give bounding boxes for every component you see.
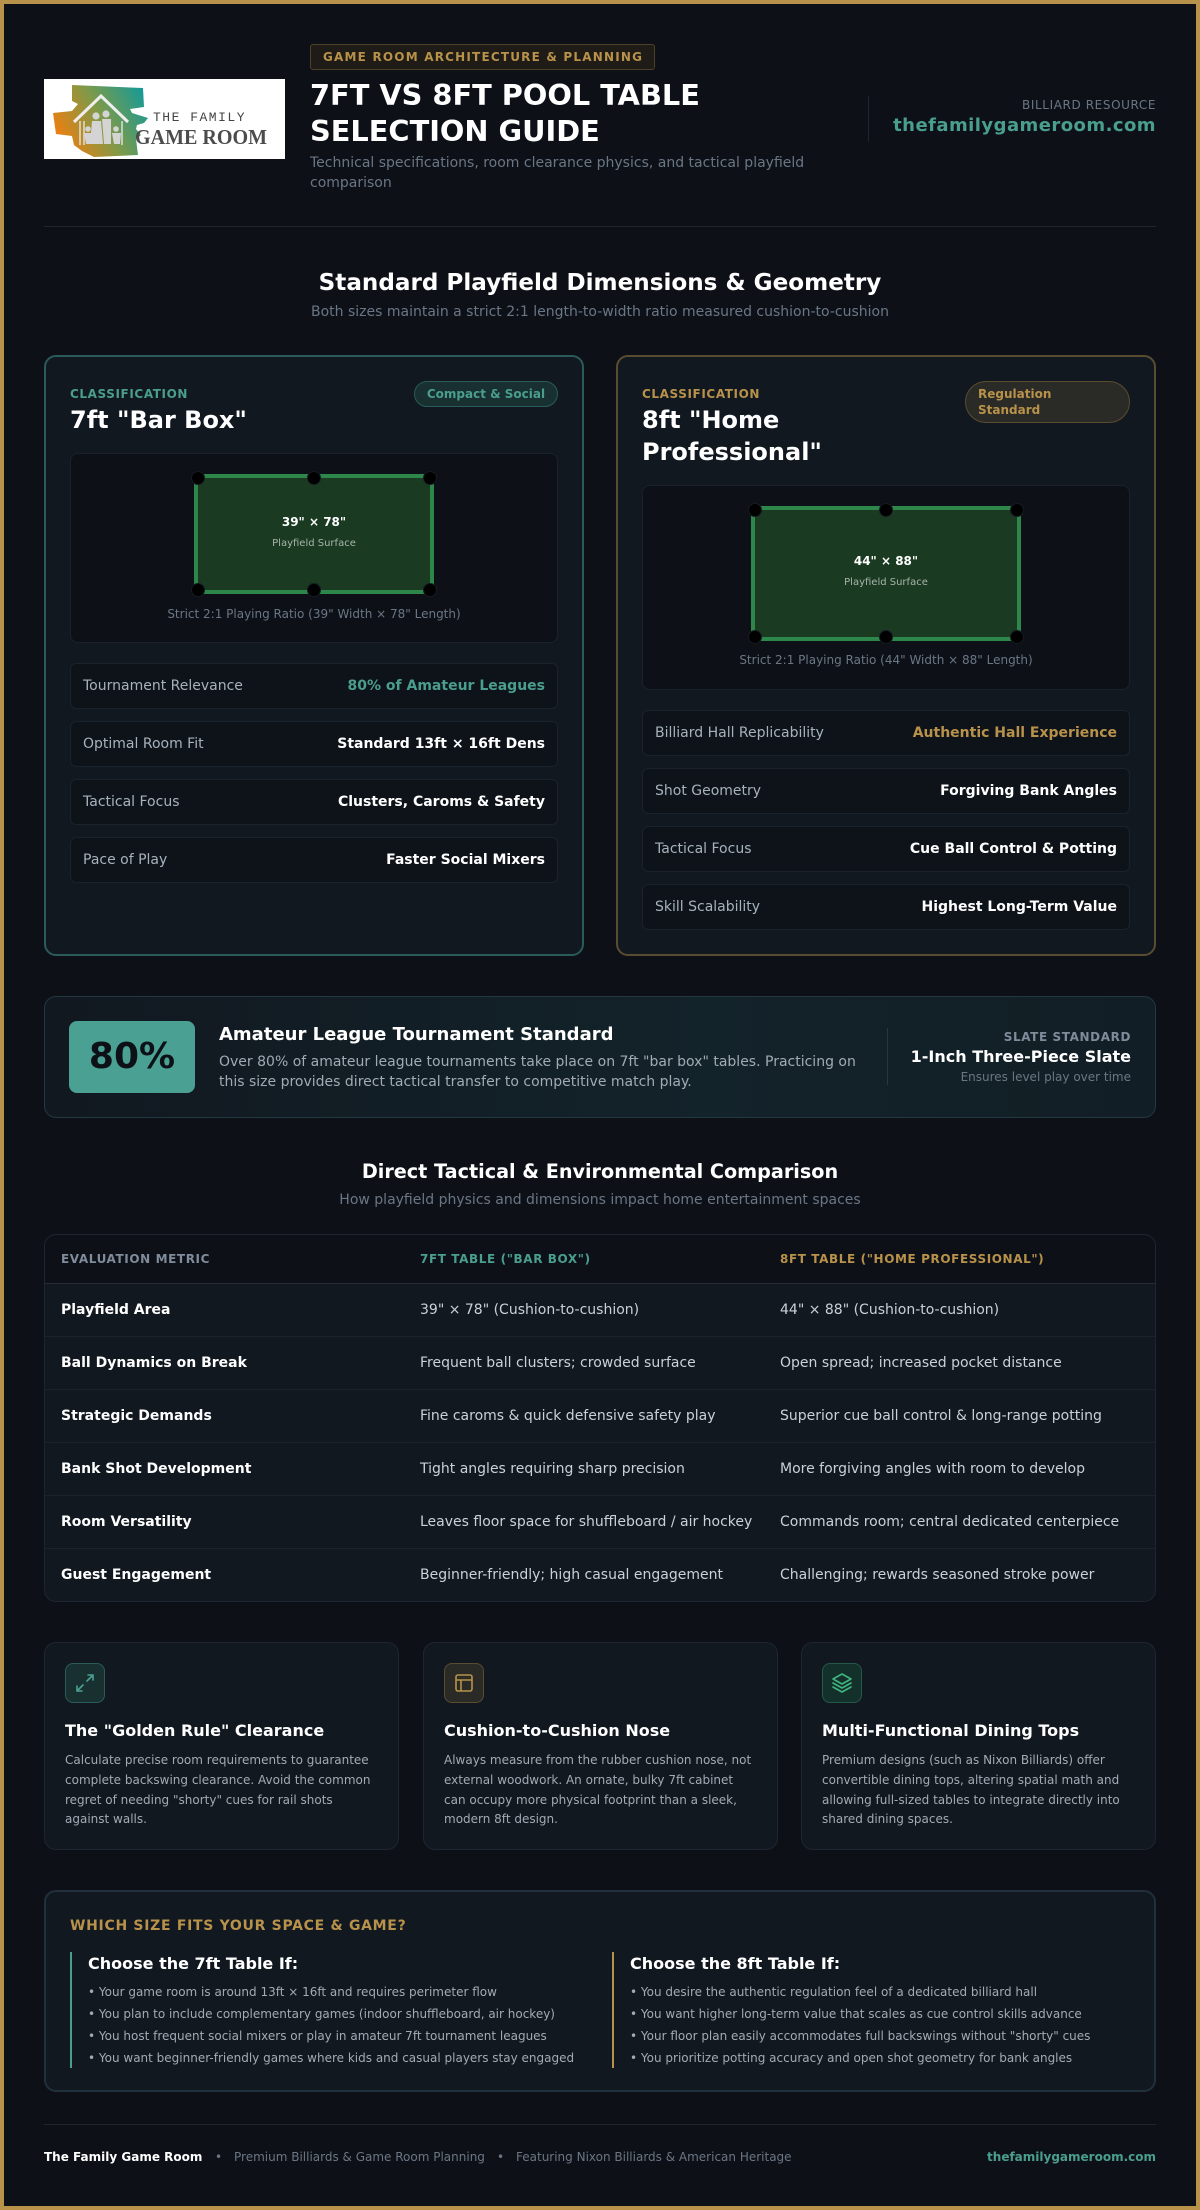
main title	[310, 78, 700, 148]
footer	[44, 2150, 1156, 2164]
bullet list: • Your game room is around 13ft × 16ft and requires perimeter flow	[88, 1985, 497, 1999]
section heading: dimensions: Standard Playfield Dimensions & Geometry	[319, 270, 881, 296]
table name: Professional"	[642, 438, 822, 466]
logo: GAME ROOM	[135, 125, 267, 149]
callout body	[219, 1054, 856, 1090]
column heading: Choose the 8ft Table If:	[630, 1954, 840, 1973]
pill badge	[965, 381, 1130, 423]
panel: dining tops tip	[801, 1642, 1156, 1850]
spec rows: Tournament Relevance	[83, 678, 243, 694]
table header	[61, 1252, 1044, 1266]
row: guest engagement: Guest Engagement	[61, 1567, 211, 1583]
spec rows	[642, 710, 1130, 930]
row: strategic demands	[61, 1408, 1102, 1424]
footer tagline: •	[215, 2150, 222, 2164]
callout: amateur league stat	[44, 996, 1156, 1118]
callout body: Over 80% of amateur league tournaments take place on 7ft "bar box" tables. Practicing on	[219, 1054, 856, 1070]
row: strategic demands: Superior cue ball control & long-range potting	[780, 1408, 1102, 1424]
spec rows: Standard 13ft × 16ft Dens	[337, 736, 545, 752]
row: room versatility	[61, 1514, 1119, 1530]
footer url: thefamilygameroom.com	[987, 2150, 1156, 2164]
tip heading: Multi-Functional Dining Tops	[822, 1721, 1079, 1740]
subtitle	[310, 155, 804, 191]
row: guest engagement: Beginner-friendly; high casual engagement	[420, 1567, 723, 1583]
spec rows	[70, 663, 558, 883]
row: strategic demands: Strategic Demands	[61, 1408, 212, 1424]
row: ball dynamics	[61, 1355, 1062, 1371]
bullet list	[630, 1985, 1090, 2065]
footer brand: The Family Game Room	[44, 2150, 202, 2164]
pill badge: Regulation	[978, 387, 1051, 401]
spec rows: Highest Long-Term Value	[921, 899, 1117, 915]
footer: Featuring Nixon Billiards & American Heritage	[516, 2150, 792, 2164]
classification label: CLASSIFICATION	[642, 387, 760, 401]
tip heading: The "Golden Rule" Clearance	[65, 1721, 324, 1740]
slate standard: 1-Inch Three-Piece Slate	[911, 1047, 1131, 1066]
spec rows: Tactical Focus	[83, 794, 180, 810]
table diagram	[642, 485, 1130, 690]
bullet list: • You plan to include complementary games (indoor shuffleboard, air hockey)	[88, 2007, 555, 2021]
row: playfield area: 44" × 88" (Cushion-to-cushion)	[780, 1302, 999, 1318]
callout heading: Amateur League Tournament Standard	[219, 1024, 613, 1045]
resource url: thefamilygameroom.com	[893, 115, 1156, 136]
row: room versatility: Room Versatility	[61, 1514, 192, 1530]
slate standard: SLATE STANDARD	[1004, 1030, 1131, 1044]
ratio caption: Strict 2:1 Playing Ratio (44" Width × 88" Length)	[739, 653, 1033, 667]
row: ball dynamics: Ball Dynamics on Break	[61, 1355, 247, 1371]
section subheading: comparison: How playfield physics and dimensions impact home entertainment spaces	[339, 1192, 861, 1208]
bullet list: • You want beginner-friendly games where kids and casual players stay engaged	[88, 2051, 574, 2065]
header tag: GAME ROOM ARCHITECTURE & PLANNING	[323, 50, 643, 64]
table name	[642, 406, 822, 466]
table header: 8FT TABLE ("HOME PROFESSIONAL")	[780, 1252, 1044, 1266]
spec rows: Cue Ball Control & Potting	[910, 841, 1117, 857]
table name: 8ft "Home	[642, 406, 779, 434]
bullet list: • You prioritize potting accuracy and open shot geometry for bank angles	[630, 2051, 1072, 2065]
row: playfield area: 39" × 78" (Cushion-to-cushion)	[420, 1302, 639, 1318]
header tag	[310, 44, 655, 70]
ratio caption: Strict 2:1 Playing Ratio (39" Width × 78" Length)	[167, 607, 461, 621]
felt surface	[751, 506, 1021, 641]
surface label: Playfield Surface	[844, 577, 928, 588]
spec rows: Optimal Room Fit	[83, 736, 204, 752]
bullet list: • Your floor plan easily accommodates full backswings without "shorty" cues	[630, 2029, 1090, 2043]
spec rows: Skill Scalability	[655, 899, 760, 915]
row: guest engagement: Challenging; rewards seasoned stroke power	[780, 1567, 1094, 1583]
logo: THE FAMILY	[153, 110, 246, 125]
subtitle: Technical specifications, room clearance physics, and tactical playfield	[310, 155, 804, 171]
row: ball dynamics: Open spread; increased pocket distance	[780, 1355, 1062, 1371]
footer: Premium Billiards & Game Room Planning	[234, 2150, 485, 2164]
pill badge: Standard	[978, 403, 1040, 417]
felt surface	[194, 474, 434, 594]
tip body: Calculate precise room requirements to guarantee complete backswing clearance. Avoid the common regret of needing "shorty" cues for rail shots against walls.	[65, 1753, 370, 1826]
table diagram	[70, 453, 558, 643]
section heading: comparison: Direct Tactical & Environmental Comparison	[362, 1160, 838, 1183]
row: room versatility: Commands room; central dedicated centerpiece	[780, 1514, 1119, 1530]
table header: 7FT TABLE ("BAR BOX")	[420, 1252, 591, 1266]
spec rows: Authentic Hall Experience	[913, 725, 1117, 741]
spec rows: Tactical Focus	[655, 841, 752, 857]
tip body: Premium designs (such as Nixon Billiards) offer convertible dining tops, altering spatial math and allowing full-sized tables to integrate directly into shared dining spaces.	[822, 1753, 1120, 1826]
spec rows: Billiard Hall Replicability	[655, 725, 824, 741]
dimension label: 39" × 78"	[282, 515, 346, 529]
panel: decision guide	[44, 1890, 1156, 2092]
section subheading: dimensions: Both sizes maintain a strict 2:1 length-to-width ratio measured cushion-to-cushion	[311, 304, 889, 320]
table name: 7ft "Bar Box"	[70, 406, 247, 434]
surface label: Playfield Surface	[272, 538, 356, 549]
column heading: Choose the 7ft Table If:	[88, 1954, 298, 1973]
pill badge	[414, 381, 558, 407]
spec rows: Pace of Play	[83, 852, 167, 868]
table header: EVALUATION METRIC	[61, 1252, 210, 1266]
spec rows: Faster Social Mixers	[386, 852, 545, 868]
resource label: BILLIARD RESOURCE	[1022, 98, 1156, 112]
column: 8ft	[612, 1952, 1132, 2068]
icon: layers	[822, 1663, 862, 1703]
icon: layout	[444, 1663, 484, 1703]
row: strategic demands: Fine caroms & quick defensive safety play	[420, 1408, 716, 1424]
stat badge: 80%	[89, 1036, 175, 1077]
panel: clearance tip	[44, 1642, 399, 1850]
spec rows: Forgiving Bank Angles	[940, 783, 1117, 799]
pockets	[191, 471, 437, 597]
tip heading: Cushion-to-Cushion Nose	[444, 1721, 670, 1740]
bullet list	[88, 1985, 574, 2065]
slate standard	[911, 1030, 1131, 1084]
row: playfield area	[61, 1302, 999, 1318]
icon: expand arrows	[65, 1663, 105, 1703]
main title: 7FT VS 8FT POOL TABLE	[310, 78, 700, 112]
panel: cushion tip	[423, 1642, 778, 1850]
column: 7ft	[70, 1952, 610, 2068]
row: bank shot	[61, 1461, 1085, 1477]
row: bank shot: More forgiving angles with room to develop	[780, 1461, 1085, 1477]
stat badge	[69, 1021, 195, 1093]
dimension label: 44" × 88"	[854, 554, 918, 568]
header divider line	[868, 96, 869, 142]
tip body: Always measure from the rubber cushion nose, not external woodwork. An ornate, bulky 7ft cabinet can occupy more physical footprint than a sleek, modern 8ft design.	[444, 1753, 751, 1826]
panel: 8ft table	[616, 355, 1156, 956]
comparison table	[44, 1234, 1156, 1602]
main title: SELECTION GUIDE	[310, 114, 600, 148]
subtitle: comparison	[310, 175, 392, 191]
bullet list: • You host frequent social mixers or play in amateur 7ft tournament leagues	[88, 2029, 547, 2043]
footer: •	[497, 2150, 504, 2164]
row: guest engagement	[61, 1567, 1094, 1583]
row: ball dynamics: Frequent ball clusters; crowded surface	[420, 1355, 696, 1371]
classification label: CLASSIFICATION	[70, 387, 188, 401]
bullet list: • You want higher long-term value that scales as cue control skills advance	[630, 2007, 1082, 2021]
callout body: this size provides direct tactical transfer to competitive match play.	[219, 1074, 692, 1090]
logo	[44, 79, 285, 159]
pill badge: Compact & Social	[427, 387, 545, 401]
guide heading: WHICH SIZE FITS YOUR SPACE & GAME?	[70, 1918, 406, 1934]
row: room versatility: Leaves floor space for shuffleboard / air hockey	[420, 1514, 752, 1530]
pockets	[748, 503, 1024, 644]
spec rows: Shot Geometry	[655, 783, 761, 799]
spec rows: 80% of Amateur Leagues	[348, 678, 545, 694]
row: playfield area: Playfield Area	[61, 1302, 170, 1318]
row: bank shot: Tight angles requiring sharp precision	[420, 1461, 685, 1477]
row: bank shot: Bank Shot Development	[61, 1461, 251, 1477]
bullet list: • You desire the authentic regulation feel of a dedicated billiard hall	[630, 1985, 1037, 1999]
slate standard: Ensures level play over time	[961, 1070, 1131, 1084]
spec rows: Clusters, Caroms & Safety	[338, 794, 545, 810]
panel: 7ft table	[44, 355, 584, 956]
